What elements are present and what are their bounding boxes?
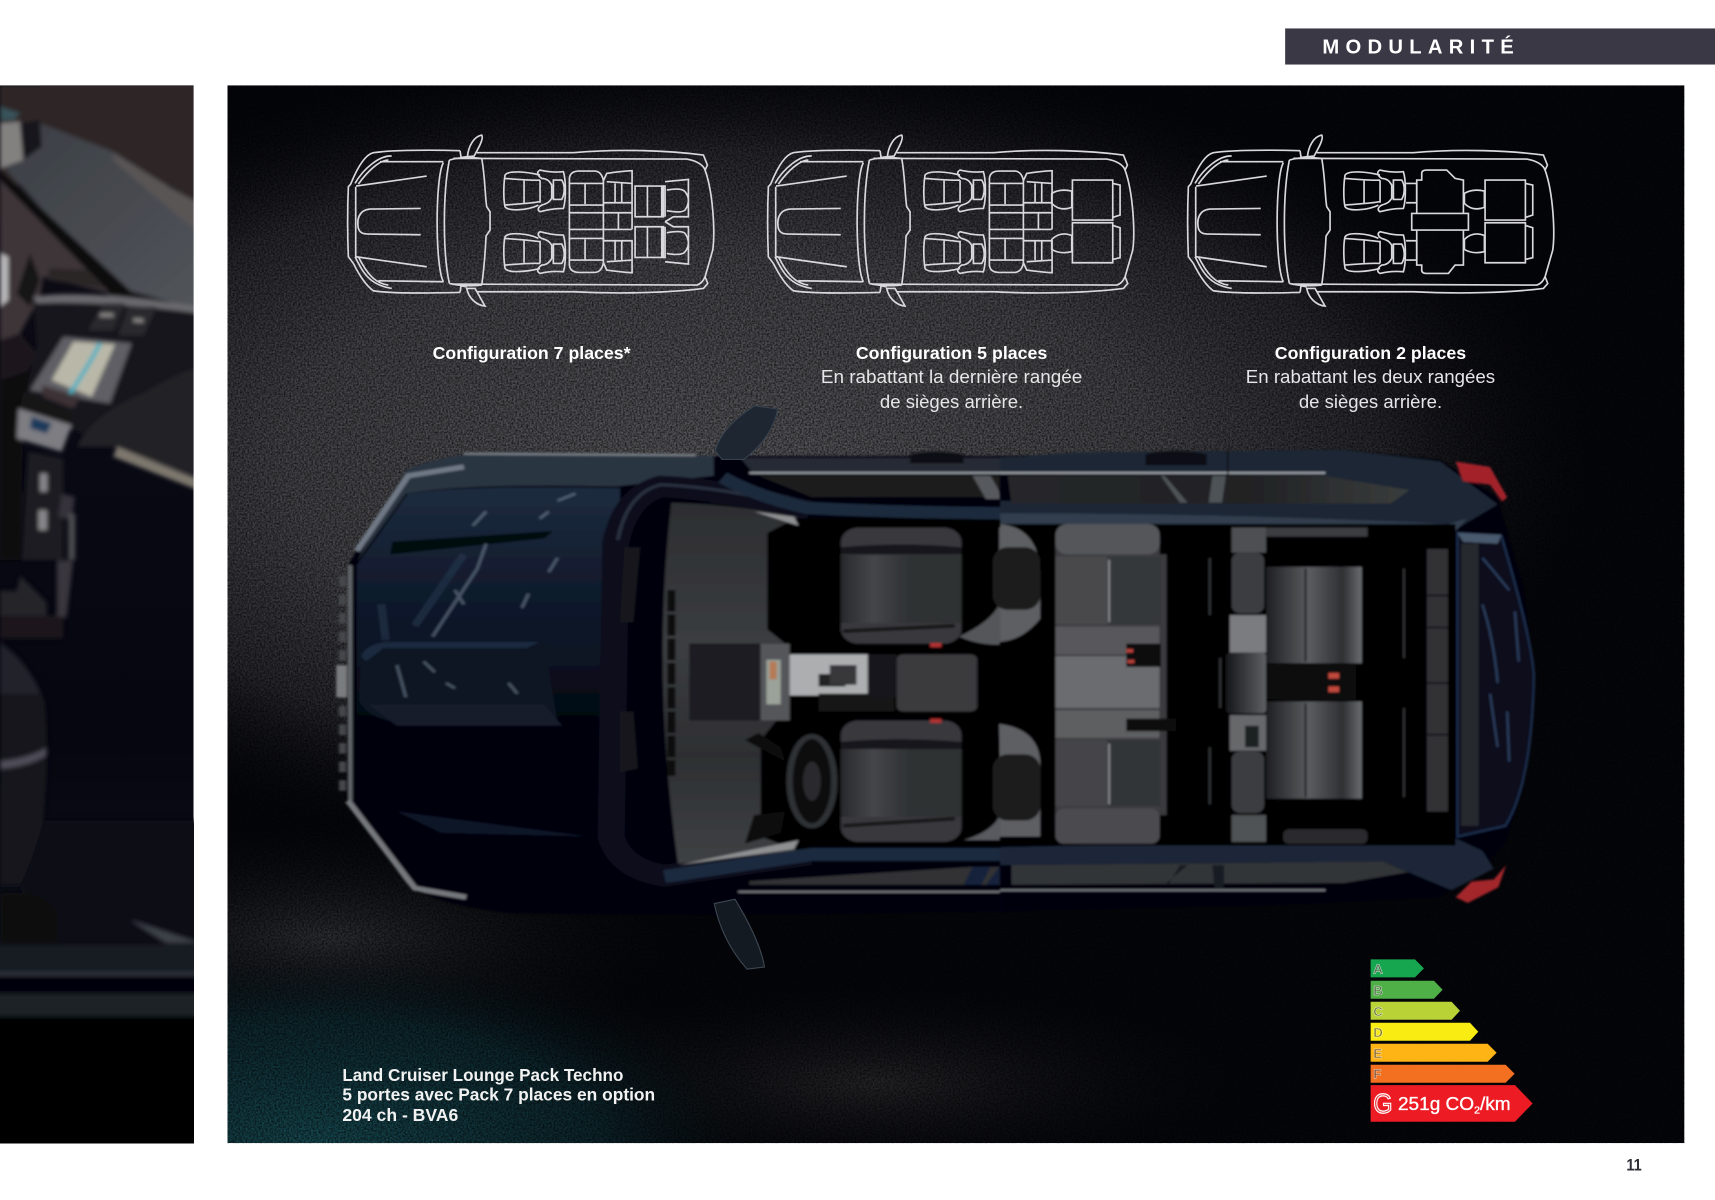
class A: A — [1373, 961, 1383, 976]
class C — [1371, 1002, 1460, 1020]
right door mirror — [714, 899, 765, 969]
boot trim — [1427, 549, 1448, 812]
left door mirror — [715, 406, 778, 459]
car rear half with seats — [992, 450, 1534, 912]
caption: configuration 2 places: En rabattant les deux rangées — [1246, 367, 1495, 387]
vehicle model caption: Land Cruiser Lounge Pack Techno — [342, 1065, 623, 1085]
hood — [357, 487, 620, 879]
seat and door sill — [0, 560, 207, 1154]
rear door and glass — [1457, 533, 1534, 837]
class G with value: /km — [1480, 1094, 1511, 1114]
caption: configuration 2 places: de sièges arrière. — [1299, 392, 1442, 412]
upper windows — [1008, 476, 1410, 504]
console — [790, 654, 870, 695]
upper fender band — [357, 452, 714, 562]
class G with value: 2 — [1474, 1105, 1480, 1116]
class B — [1371, 981, 1443, 999]
lower chrome — [348, 801, 466, 897]
CO2 energy label chart — [1371, 959, 1533, 1122]
section title: MODULARITÉ — [1322, 36, 1514, 59]
front seat lower — [841, 720, 961, 842]
interior floor — [758, 519, 1030, 854]
caption: configuration 2 places: Configuration 2 places — [1275, 343, 1466, 363]
class G with value: 251g CO — [1398, 1094, 1470, 1114]
wireframe: configuration 2 places — [1188, 135, 1554, 306]
windshield glass — [663, 503, 799, 863]
class G with value: G — [1373, 1088, 1393, 1119]
class A — [1371, 959, 1424, 977]
front headrests — [959, 528, 1030, 645]
third row folded seats — [1266, 528, 1368, 537]
dashboard interior upper — [0, 80, 200, 560]
class F: F — [1373, 1066, 1381, 1081]
second row bench — [1056, 524, 1160, 844]
class E — [1371, 1044, 1497, 1062]
steering wheel — [790, 737, 834, 826]
wireframe: configuration 5 places — [768, 135, 1134, 306]
caption: configuration 2 places — [1246, 343, 1495, 412]
class C: C — [1373, 1004, 1383, 1019]
taillights — [1456, 462, 1507, 502]
wireframe: configuration 7 places — [348, 135, 714, 306]
car photo: top view cutaway — [336, 406, 1534, 969]
panel: main asphalt background — [228, 85, 1684, 1143]
class D — [1371, 1023, 1478, 1041]
vehicle model caption — [342, 1065, 655, 1125]
car front half with hood and cockpit — [336, 452, 1030, 915]
lower side panel — [1000, 838, 1494, 890]
class E: E — [1373, 1046, 1382, 1061]
second row headrests block — [1232, 528, 1266, 553]
class F — [1371, 1065, 1515, 1083]
vehicle model caption: 5 portes avec Pack 7 places en option — [342, 1084, 655, 1104]
vehicle model caption: 204 ch - BVA6 — [342, 1105, 459, 1125]
grille — [334, 576, 350, 797]
class D: D — [1373, 1025, 1383, 1040]
caption: configuration 5 places: de sièges arrière. — [880, 392, 1023, 412]
front seat edge — [1000, 524, 1040, 642]
A-pillar frame — [611, 487, 810, 876]
page number: 11 — [1626, 1156, 1642, 1174]
class B: B — [1373, 983, 1383, 998]
side windows — [741, 458, 1030, 474]
dash — [689, 644, 763, 720]
upper side panel — [1000, 450, 1498, 529]
panel: cabin photo on the left — [0, 80, 207, 1154]
caption: configuration 7 places: Configuration 7 places* — [433, 343, 631, 363]
caption: configuration 5 places: En rabattant la dernière rangée — [821, 367, 1082, 387]
caption: configuration 5 places — [821, 343, 1082, 412]
front seat upper — [841, 528, 961, 644]
caption: configuration 5 places: Configuration 5 places — [856, 343, 1048, 363]
interior floor — [1000, 524, 1456, 845]
class G with value — [1371, 1085, 1533, 1122]
section header bar — [1285, 28, 1715, 65]
